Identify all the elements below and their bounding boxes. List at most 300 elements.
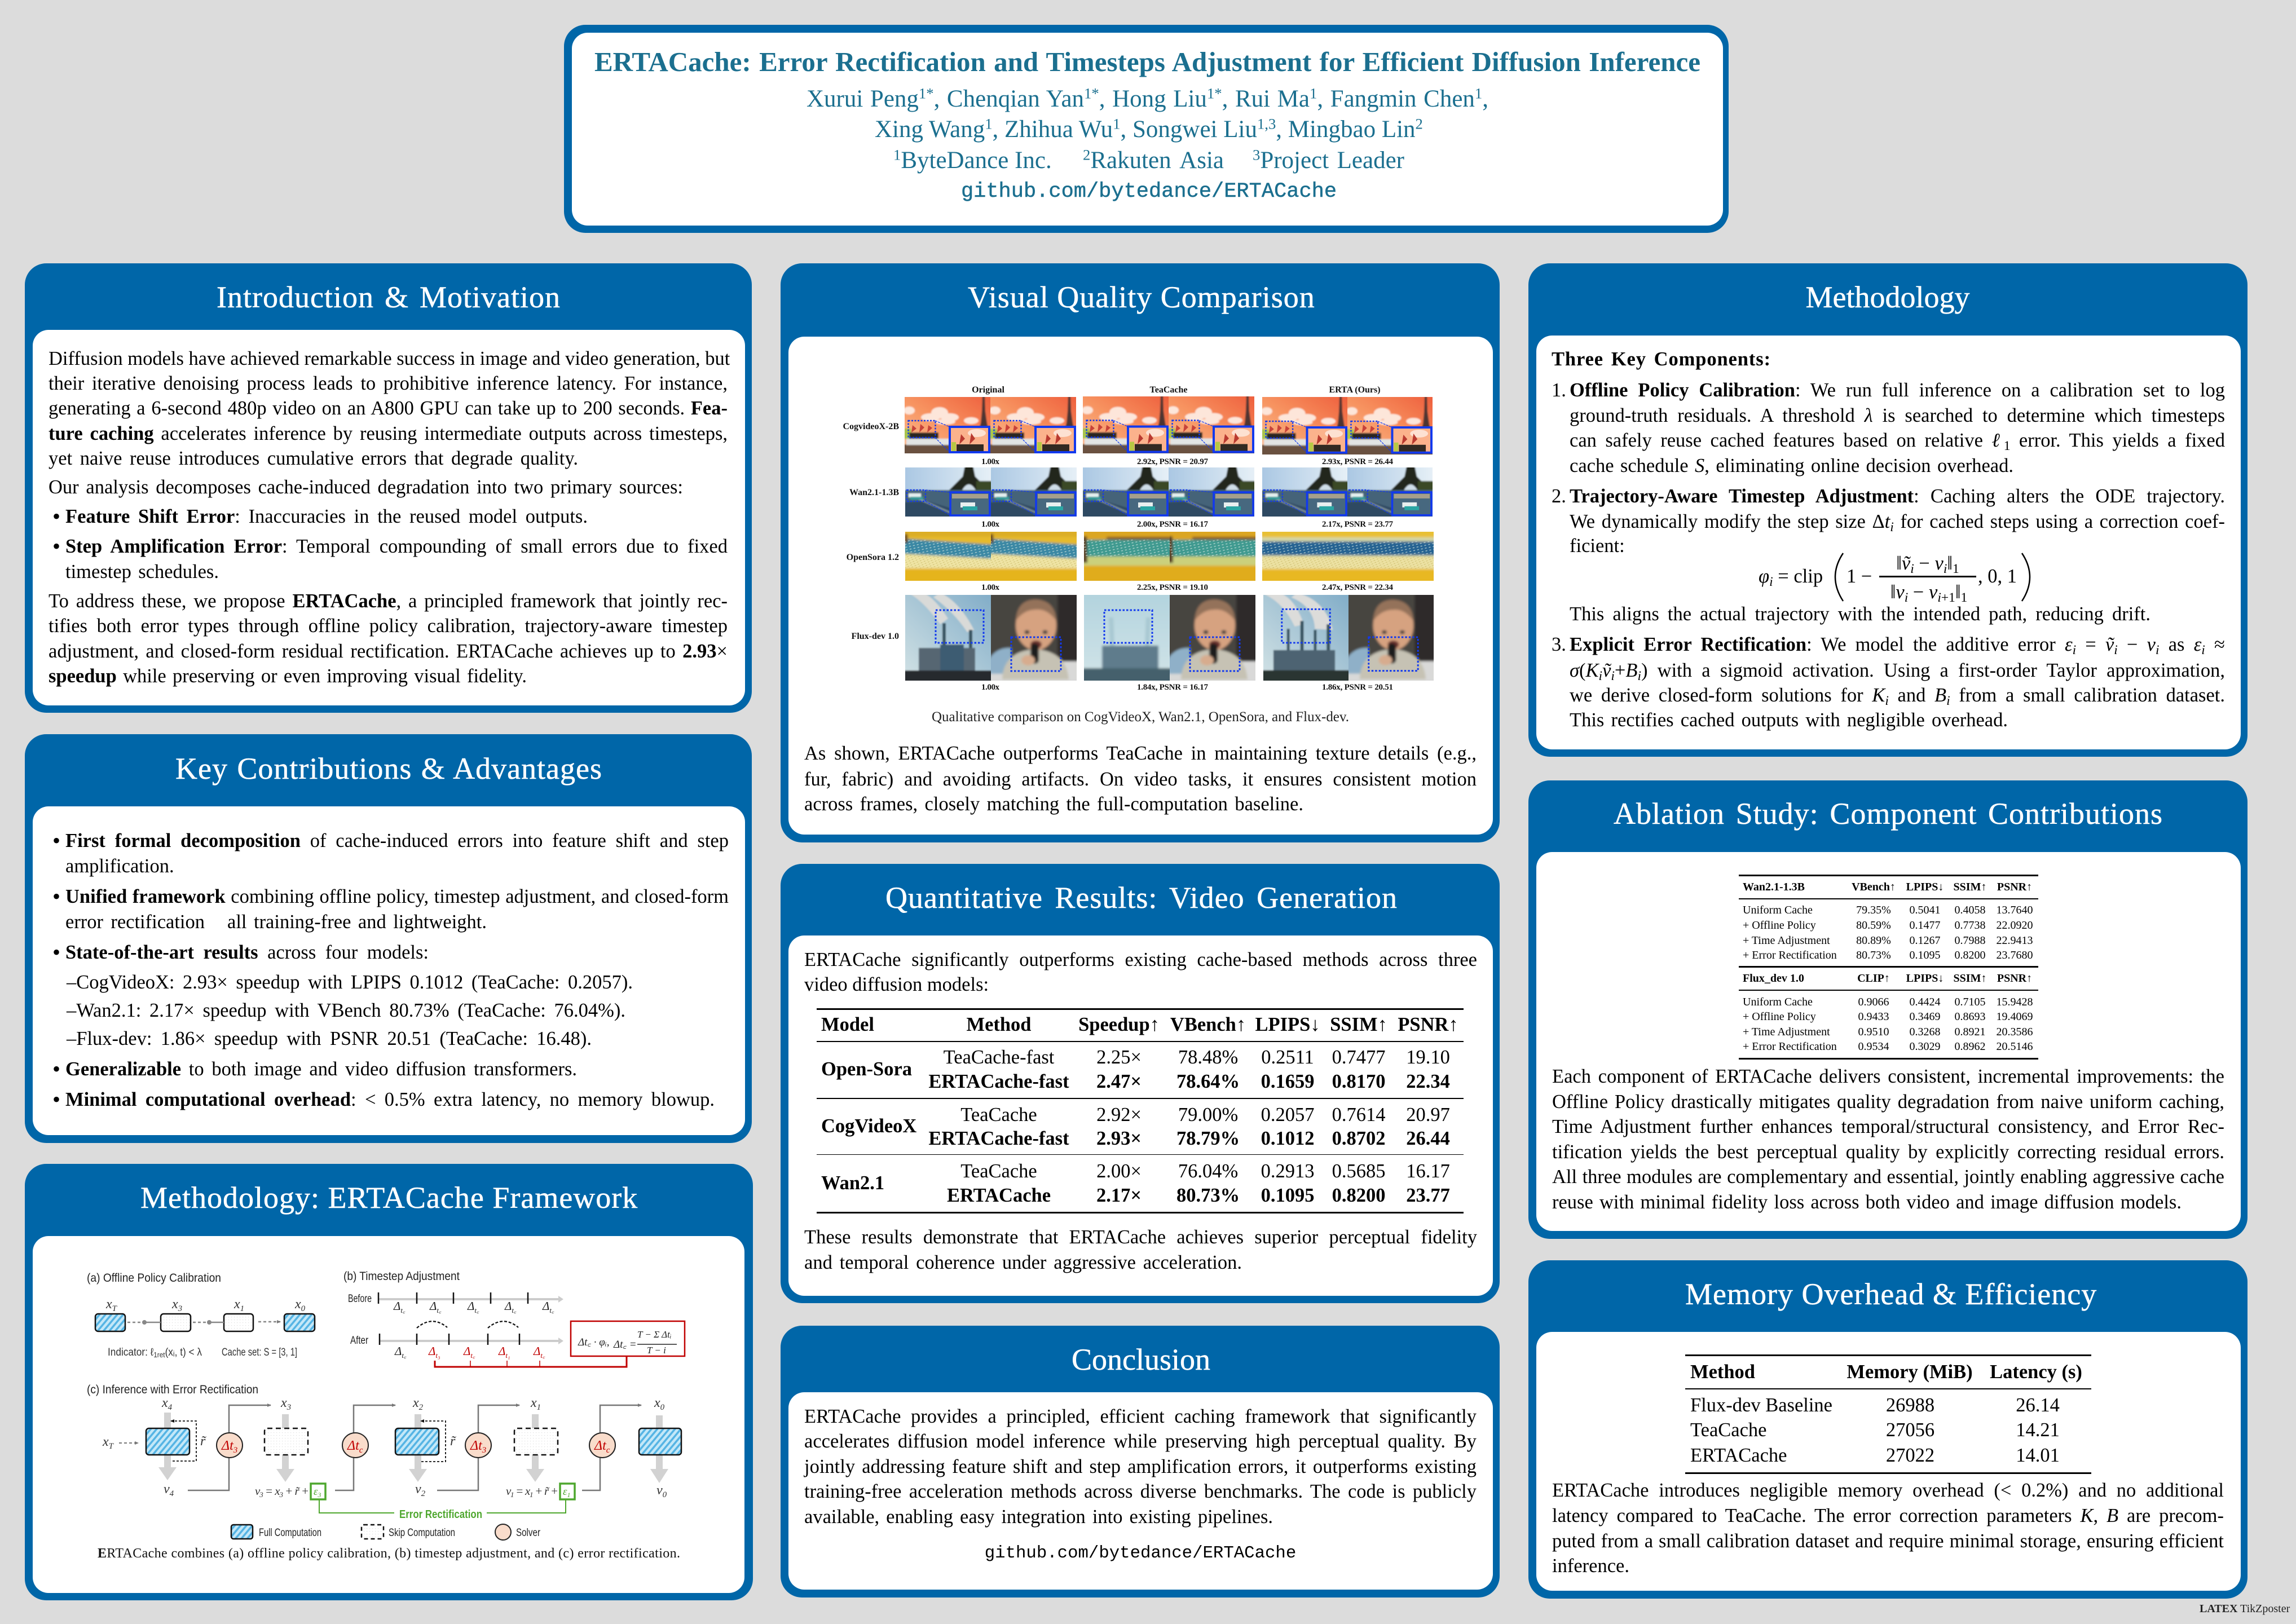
ablation summary: All three modules are complementary and essential, jointly enabling aggressive cache: [1552, 1166, 2224, 1188]
ablation table: 19.4069: [1997, 1010, 2033, 1023]
contribution list: •: [52, 884, 60, 909]
comparison image grid: [843, 385, 1434, 725]
(c) inference with error rectification: 3: [287, 1403, 291, 1412]
speedup captions: 2.25x, PSNR = 19.10: [1137, 583, 1208, 592]
intro text: [804, 949, 1477, 995]
ablation table: PSNR↑: [1997, 972, 2032, 985]
(c) inference with error rectification: 3: [482, 1446, 486, 1455]
memory table: Method: [1690, 1361, 1755, 1383]
(c) inference with error rectification: 3: [317, 1491, 321, 1499]
contribution list: Unified framework combining offline policy, timestep adjustment, and closed-form: [65, 886, 729, 907]
results table: 0.1012: [1261, 1128, 1314, 1149]
conclusion text: ERTACache provides a principled, efficient caching framework that significantly: [804, 1406, 1477, 1427]
contribution list: •: [52, 939, 60, 965]
(b) timestep adjustment: Δ: [395, 1344, 402, 1358]
row: CogVideoX images: [901, 394, 1436, 458]
ablation table: 80.89%: [1856, 934, 1891, 947]
diagram legend: Skip Computation: [389, 1527, 455, 1539]
formula: correction coefficient: [1759, 553, 2030, 605]
results table: 78.48%: [1178, 1047, 1238, 1068]
results table: 23.77: [1406, 1185, 1450, 1206]
(c) inference with error rectification: 1: [530, 1490, 534, 1499]
row labels: OpenSora 1.2: [847, 553, 899, 562]
(c) inference with error rectification: Error Rectification: [399, 1508, 482, 1521]
ablation table: Wan2.1-1.3B: [1743, 881, 1805, 893]
speedup captions: 1.00x: [981, 520, 999, 529]
(a) offline policy calibration: (xᵢ, t) < λ: [165, 1347, 202, 1358]
(a) offline policy calibration: Cache set: S = [3, 1]: [222, 1347, 297, 1358]
results table: PSNR↑: [1398, 1014, 1458, 1035]
proposal paragraph: speedup while preserving or even improving visual fidelity.: [49, 665, 527, 687]
(b) timestep adjustment: Δ: [534, 1344, 540, 1358]
ablation table: [1739, 875, 2038, 1060]
ablation table: 23.7680: [1997, 949, 2033, 961]
intro text: ERTACache significantly outperforms existing cache-based methods across three: [804, 949, 1477, 970]
speedup captions: 1.00x: [981, 583, 999, 592]
conclusion text: [804, 1406, 1477, 1528]
results table: 16.17: [1406, 1160, 1450, 1182]
conclusion text: training-free acceleration methods across diverse benchmarks. The code is publicly: [804, 1481, 1477, 1502]
component 2: ficient:: [1570, 535, 1625, 557]
row labels: [843, 422, 899, 641]
formula: correction coefficient: ‖ṽi − vi‖1: [1896, 553, 1959, 576]
ablation table: 13.7640: [1997, 904, 2033, 916]
(b) timestep adjustment: t꜀: [512, 1306, 517, 1314]
(a) offline policy calibration: 3: [178, 1304, 182, 1313]
conclusion text: accelerates diffusion model inference while preserving high perceptual quality. By: [804, 1431, 1477, 1452]
results table: 80.73%: [1176, 1185, 1240, 1206]
comparison paragraph: across frames, closely matching the full-computation baseline.: [804, 793, 1303, 815]
(b) timestep adjustment: After: [350, 1335, 369, 1347]
memory table: 14.21: [2016, 1419, 2060, 1441]
(b) timestep adjustment: Δ: [464, 1344, 470, 1358]
(c) inference with error rectification: x: [162, 1396, 168, 1410]
component 3: Explicit Error Rectification: We model the additive error εi = ṽi − vi as εi ≈: [1570, 634, 2225, 657]
error type bullets: •: [52, 533, 60, 559]
(b) timestep adjustment: Δ: [430, 1299, 437, 1313]
error type bullets: Step Amplification Error: Temporal compounding of small errors due to fixed: [65, 536, 728, 557]
memory table: ERTACache: [1690, 1445, 1787, 1466]
results table: 0.8170: [1332, 1071, 1385, 1092]
(a) offline policy calibration: x: [106, 1297, 112, 1312]
results table: SSIM↑: [1330, 1014, 1387, 1035]
contribution list: Minimal computational overhead: < 0.5% extra latency, no memory blowup.: [65, 1089, 715, 1110]
alignment sentence: This aligns the actual trajectory with the intended path, reducing drift.: [1570, 603, 2150, 625]
memory table: Flux-dev Baseline: [1690, 1394, 1832, 1416]
component 1: 1.: [1552, 379, 1566, 401]
component 3: This rectifies cached outputs with negligible overhead.: [1570, 709, 2008, 731]
formula: correction coefficient: ‖vi − vi+1‖1: [1890, 581, 1967, 605]
(b) timestep adjustment: t꜀: [549, 1306, 554, 1314]
ablation table: 0.1267: [1910, 934, 1940, 947]
(c) inference with error rectification: x: [281, 1396, 287, 1410]
column headers: ERTA (Ours): [1329, 385, 1381, 395]
(c) inference with error rectification: + r̃ +: [532, 1484, 558, 1498]
contribution list: amplification.: [65, 855, 174, 877]
comparison paragraph: As shown, ERTACache outperforms TeaCache in maintaining texture details (e.g.,: [804, 743, 1477, 764]
(c) inference with error rectification: 1: [537, 1403, 541, 1412]
memory table: 27056: [1886, 1419, 1934, 1441]
results table: Model: [821, 1014, 874, 1035]
panel: methodology components: [1528, 263, 2247, 757]
formula: correction coefficient: , 0, 1: [1978, 566, 2017, 587]
ablation summary: tification yields the best perceptual quality by explicitly correcting residual errors.: [1552, 1141, 2224, 1163]
(c) inference with error rectification: T: [109, 1442, 114, 1451]
results table: 78.64%: [1176, 1071, 1240, 1092]
results table: 0.8200: [1332, 1185, 1385, 1206]
(c) inference with error rectification: 0: [663, 1490, 667, 1499]
component 3: σ(Kiṽi+Bi) with a sigmoid activation. Using a first-order Taylor approximation,: [1570, 660, 2225, 683]
(c) inference with error rectification: 2: [421, 1489, 426, 1498]
results table: ERTACache-fast: [928, 1071, 1069, 1092]
column headers: Original: [972, 385, 1004, 395]
affiliations: 1ByteDance Inc.: [893, 146, 1052, 174]
panel: ablation study: [1528, 780, 2247, 1239]
contribution list: Generalizable to both image and video diffusion transformers.: [65, 1058, 577, 1080]
ablation table: VBench↑: [1852, 881, 1896, 893]
(c) inference with error rectification: [87, 1383, 681, 1521]
results table: 0.7477: [1332, 1047, 1385, 1068]
(a) offline policy calibration: x: [295, 1297, 301, 1312]
component 1: [1552, 379, 2225, 476]
ablation summary: reuse with minimal fidelity loss across both video and image diffusion models.: [1552, 1191, 2182, 1213]
ablation table: 80.73%: [1856, 949, 1891, 961]
(b) timestep adjustment: t꜀: [470, 1351, 475, 1360]
results summary: [804, 1226, 1477, 1273]
(a) offline policy calibration: Indicator: ℓ: [108, 1347, 158, 1358]
ablation table: Uniform Cache: [1743, 996, 1813, 1008]
ablation table: LPIPS↓: [1906, 881, 1944, 893]
panel: memory overhead: [1528, 1260, 2247, 1599]
ablation table: 0.4058: [1955, 904, 1985, 916]
results table: 2.93×: [1096, 1128, 1142, 1149]
(c) inference with error rectification: v: [255, 1484, 260, 1498]
panel: methodology framework: [25, 1164, 753, 1600]
memory table: [1685, 1354, 2091, 1474]
ablation table: 20.5146: [1997, 1040, 2033, 1053]
heading: Memory Overhead & Efficiency: [1685, 1277, 2097, 1311]
ablation table: 0.7105: [1955, 996, 1985, 1008]
results table: Wan2.1: [821, 1172, 884, 1194]
ablation table: 0.5041: [1910, 904, 1940, 916]
(c) inference with error rectification: x: [531, 1396, 537, 1410]
memory table: Memory (MiB): [1847, 1361, 1973, 1383]
heading: Visual Quality Comparison: [968, 280, 1315, 314]
results table: TeaCache-fast: [944, 1047, 1054, 1068]
ablation table: + Offline Policy: [1743, 919, 1816, 932]
(c) inference with error rectification: v: [656, 1483, 663, 1498]
intro paragraph: their iterative denoising process leads to prohibitive inference latency. For instance,: [49, 373, 728, 394]
(c) inference with error rectification: r̃: [200, 1434, 206, 1449]
proposal paragraph: adjustment, and closed-form residual rectification. ERTACache achieves up to 2.93×: [49, 641, 728, 662]
error type bullets: [52, 504, 728, 582]
component 2: [1552, 486, 2225, 557]
(c) inference with error rectification: Δt: [594, 1438, 606, 1453]
ablation table: + Offline Policy: [1743, 1010, 1816, 1023]
conclusion text: jointly addressing feature shift and step amplification errors, it outperforms existing: [804, 1456, 1477, 1477]
formula: correction coefficient: φi = clip: [1759, 566, 1823, 589]
poster title: ERTACache: Error Rectification and Timesteps Adjustment for Efficient Diffusion Inference: [594, 46, 1700, 77]
memory table: Latency (s): [1990, 1361, 2082, 1383]
(a) offline policy calibration: T: [112, 1304, 118, 1313]
panel: conclusion: [781, 1326, 1500, 1597]
(b) timestep adjustment: t₃: [435, 1351, 440, 1360]
affiliations: 2Rakuten Asia: [1083, 146, 1224, 174]
(b) timestep adjustment: Δ: [543, 1299, 549, 1313]
ablation table: + Time Adjustment: [1743, 1026, 1830, 1038]
results table: 0.1095: [1261, 1185, 1314, 1206]
results summary: These results demonstrate that ERTACache achieves superior perceptual fidelity: [804, 1226, 1477, 1248]
results table: TeaCache: [960, 1160, 1037, 1182]
results table: 78.79%: [1176, 1128, 1240, 1149]
ablation table: + Error Rectification: [1743, 1040, 1837, 1053]
results table: 2.25×: [1096, 1047, 1142, 1068]
intro paragraph: ture caching accelerates inference by reusing intermediate outputs across timesteps,: [49, 423, 728, 444]
ablation summary: Each component of ERTACache delivers consistent, incremental improvements: the: [1552, 1066, 2224, 1087]
(b) timestep adjustment: t꜀: [540, 1351, 545, 1360]
(c) inference with error rectification: x: [103, 1435, 109, 1449]
ablation table: SSIM↑: [1954, 881, 1986, 893]
heading: Ablation Study: Component Contributions: [1614, 797, 2163, 831]
affiliations: [893, 146, 1404, 174]
heading: Conclusion: [1072, 1343, 1210, 1376]
speedup captions: 2.00x, PSNR = 16.17: [1137, 520, 1208, 529]
component 3: 3.: [1552, 634, 1566, 655]
(c) inference with error rectification: 4: [170, 1489, 174, 1498]
(c) inference with error rectification: v: [415, 1482, 421, 1497]
results table: 20.97: [1406, 1104, 1450, 1126]
results summary: and temporal coherence under aggressive acceleration.: [804, 1252, 1242, 1273]
(b) timestep adjustment: Δ: [505, 1299, 512, 1313]
memory table: 26988: [1886, 1394, 1934, 1416]
column headers: [972, 385, 1381, 395]
figure caption: ERTACache combines (a) offline policy calibration, (b) timestep adjustment, and (c) error rectification.: [98, 1546, 680, 1561]
ablation table: 80.59%: [1856, 919, 1891, 932]
ablation table: 0.3469: [1910, 1010, 1940, 1023]
(c) inference with error rectification: c: [606, 1446, 610, 1455]
contribution list: •: [52, 1087, 60, 1112]
ablation table: 22.9413: [1997, 934, 2033, 947]
component 2: 2.: [1552, 486, 1566, 507]
(c) inference with error rectification: 1: [567, 1491, 571, 1499]
ablation summary: [1552, 1064, 2224, 1215]
(b) timestep adjustment: t꜀: [437, 1306, 442, 1314]
(b) timestep adjustment: Before: [348, 1293, 372, 1305]
component 3: we derive closed-form solutions for Ki and Bi from a small calibration dataset.: [1570, 685, 2225, 708]
ablation table: PSNR↑: [1997, 881, 2032, 893]
ablation table: 0.8962: [1955, 1040, 1985, 1053]
ablation table: LPIPS↓: [1906, 972, 1944, 985]
memory table: 14.01: [2016, 1445, 2060, 1466]
memory summary: ERTACache introduces negligible memory overhead (< 0.2%) and no additional: [1552, 1480, 2224, 1501]
error type bullets: •: [52, 504, 60, 529]
affiliations: 3Project Leader: [1253, 146, 1404, 174]
component 1: cache schedule S, eliminating online decision overhead.: [1570, 455, 2013, 476]
row labels: Flux-dev 1.0: [852, 632, 899, 641]
heading: Methodology: [1806, 280, 1969, 314]
intro paragraph: yet naive reuse introduces cumulative errors that degrade quality.: [49, 448, 578, 469]
(c) inference with error rectification: Δt: [470, 1438, 482, 1453]
heading: Methodology: ERTACache Framework: [140, 1181, 638, 1215]
contribution list: –CogVideoX: 2.93× speedup with LPIPS 0.1012 (TeaCache: 0.2057).: [67, 972, 633, 993]
results table: CogVideoX: [821, 1115, 916, 1137]
ablation table: 0.3029: [1910, 1040, 1940, 1053]
proposal paragraph: [49, 590, 728, 687]
results table: 0.5685: [1332, 1160, 1385, 1182]
ablation table: 0.1095: [1910, 949, 1940, 961]
speedup captions: 1.84x, PSNR = 16.17: [1137, 683, 1208, 692]
component 2: Trajectory-Aware Timestep Adjustment: Caching alters the ODE trajectory.: [1570, 486, 2225, 507]
(b) timestep adjustment: Δ: [499, 1344, 505, 1358]
results table: 22.34: [1406, 1071, 1450, 1092]
(c) inference with error rectification: ε: [314, 1486, 318, 1498]
(a) offline policy calibration: (a) Offline Policy Calibration: [87, 1272, 221, 1285]
heading: Quantitative Results: Video Generation: [885, 881, 1398, 915]
ablation summary: Time Adjustment further enhances temporal/structural consistency, and Error Rec-: [1552, 1116, 2224, 1137]
speedup captions: 1.00x: [981, 457, 999, 466]
results table: 2.47×: [1096, 1071, 1142, 1092]
(b) timestep adjustment: t꜀: [400, 1306, 406, 1314]
component 2: We dynamically modify the step size Δti for cached steps using a correction coef-: [1570, 511, 2225, 535]
results table: Open-Sora: [821, 1058, 912, 1080]
ablation table: Uniform Cache: [1743, 904, 1813, 916]
(c) inference with error rectification: v: [506, 1484, 511, 1498]
(c) inference with error rectification: 3: [233, 1446, 237, 1455]
ablation table: + Error Rectification: [1743, 949, 1837, 961]
contribution list: [52, 828, 729, 1112]
(a) offline policy calibration: x: [234, 1297, 240, 1312]
panel: quantitative results: [781, 864, 1500, 1303]
panel: key contributions: [25, 734, 752, 1143]
formula: correction coefficient: 1 −: [1847, 566, 1872, 587]
intro text: video diffusion models:: [804, 974, 989, 995]
proposal paragraph: To address these, we propose ERTACache, a principled framework that jointly rec-: [49, 590, 728, 612]
ablation table: 0.9534: [1858, 1040, 1889, 1053]
(b) timestep adjustment: t₁: [505, 1351, 510, 1360]
analysis sentence: Our analysis decomposes cache-induced degradation into two primary sources:: [49, 476, 683, 498]
ablation table: 79.35%: [1856, 904, 1891, 916]
(b) timestep adjustment: t꜀: [474, 1306, 479, 1314]
memory table: 26.14: [2016, 1394, 2060, 1416]
comparison paragraph: [804, 743, 1477, 815]
framework diagram: [87, 1270, 686, 1561]
contribution list: •: [52, 1056, 60, 1082]
results table: 0.2057: [1261, 1104, 1314, 1126]
component 1: can safely reuse cached features based on relative ℓ1 error. This yields a fixed: [1570, 430, 2225, 453]
authors: [807, 85, 1488, 143]
heading: Introduction & Motivation: [217, 280, 561, 314]
error type bullets: timestep schedules.: [65, 561, 219, 582]
memory table: TeaCache: [1690, 1419, 1766, 1441]
results table: 0.2511: [1261, 1047, 1314, 1068]
(c) inference with error rectification: 3: [259, 1490, 263, 1499]
intro paragraph: generating a 6-second 480p video on an A800 GPU can take up to 200 seconds. Fea-: [49, 398, 728, 419]
results table: TeaCache: [960, 1104, 1037, 1126]
diagram legend: Full Computation: [259, 1527, 321, 1539]
footer credit: LATEX TikZposter: [2200, 1603, 2290, 1615]
intro paragraph: [49, 348, 730, 469]
row: OpenSora images: [902, 528, 1437, 584]
(b) timestep adjustment: t꜀: [402, 1351, 407, 1360]
results table: 0.8702: [1332, 1128, 1385, 1149]
row: Wan2.1 images: [902, 464, 1436, 520]
ablation table: 22.0920: [1997, 919, 2033, 932]
ablation table: 15.9428: [1997, 996, 2033, 1008]
memory summary: inference.: [1552, 1555, 1629, 1577]
ablation table: 0.3268: [1910, 1026, 1940, 1038]
(c) inference with error rectification: = x: [513, 1484, 531, 1498]
(c) inference with error rectification: x: [413, 1396, 419, 1410]
(a) offline policy calibration: 0: [301, 1304, 306, 1313]
(b) timestep adjustment: Δt꜀ =: [613, 1339, 637, 1351]
authors: Xing Wang1, Zhihua Wu1, Songwei Liu1,3, Mingbao Lin2: [875, 115, 1423, 143]
(c) inference with error rectification: x: [654, 1396, 660, 1410]
results table: 0.1659: [1261, 1071, 1314, 1092]
speedup captions: 2.47x, PSNR = 22.34: [1322, 583, 1393, 592]
results table: 26.44: [1406, 1128, 1450, 1149]
intro paragraph: Diffusion models have achieved remarkable success in image and video generation, but: [49, 348, 730, 369]
(c) inference with error rectification: 2: [419, 1403, 424, 1412]
ablation table: 0.9066: [1858, 996, 1889, 1008]
results table: 0.7614: [1332, 1104, 1385, 1126]
row labels: CogvideoX-2B: [843, 422, 899, 431]
results table: ERTACache-fast: [928, 1128, 1069, 1149]
comparison paragraph: fur, fabric) and avoiding artifacts. On video tasks, it ensures consistent motion: [804, 769, 1477, 790]
memory summary: puted from a small calibration dataset and require minimal storage, ensuring efficient: [1552, 1530, 2224, 1552]
(c) inference with error rectification: r̃: [450, 1434, 456, 1449]
ablation table: CLIP↑: [1857, 972, 1890, 985]
(c) inference with error rectification: + r̃ +: [283, 1484, 309, 1498]
results table: 2.17×: [1096, 1185, 1142, 1206]
panel: visual quality comparison: [781, 263, 1500, 842]
github link: github.com/bytedance/ERTACache: [985, 1543, 1296, 1563]
(a) offline policy calibration: x: [172, 1297, 178, 1312]
subheading: Three Key Components:: [1552, 348, 1771, 370]
title panel: [564, 25, 1729, 233]
(b) timestep adjustment: Δ: [429, 1344, 435, 1358]
ablation table: 0.8921: [1955, 1026, 1985, 1038]
authors: Xurui Peng1*, Chenqian Yan1*, Hong Liu1*, Rui Ma1, Fangmin Chen1,: [807, 85, 1488, 112]
ablation table: Flux_dev 1.0: [1743, 972, 1804, 985]
ablation table: + Time Adjustment: [1743, 934, 1830, 947]
row: Flux-dev images: [902, 592, 1437, 684]
results table: ERTACache: [947, 1185, 1051, 1206]
heading: Key Contributions & Advantages: [175, 752, 602, 785]
conclusion text: available, enabling easy integration into existing pipelines.: [804, 1506, 1273, 1528]
results table: 19.10: [1406, 1047, 1450, 1068]
(a) offline policy calibration: 1: [240, 1304, 244, 1313]
memory summary: latency compared to TeaCache. The error correction parameters K, B are precom-: [1552, 1505, 2224, 1526]
component 3: [1552, 632, 2225, 732]
ablation table: 20.3586: [1997, 1026, 2033, 1038]
contribution list: First formal decomposition of cache-induced errors into feature shift and step: [65, 830, 729, 851]
(b) timestep adjustment: Δ: [468, 1299, 474, 1313]
ablation table: 0.9510: [1858, 1026, 1889, 1038]
ablation table: SSIM↑: [1954, 972, 1986, 985]
results table: Speedup↑: [1078, 1014, 1160, 1035]
error type bullets: Feature Shift Error: Inaccuracies in the reused model outputs.: [65, 506, 588, 527]
(c) inference with error rectification: ε: [563, 1486, 567, 1498]
ablation table: 0.8200: [1955, 949, 1985, 961]
(c) inference with error rectification: Δt: [222, 1438, 233, 1453]
speedup captions: [981, 457, 1393, 692]
ablation table: 0.7738: [1955, 919, 1985, 932]
component 1: Offline Policy Calibration: We run full inference on a calibration set to log: [1570, 379, 2225, 401]
results table: 2.92×: [1096, 1104, 1142, 1126]
component 1: ground-truth residuals. A threshold λ is searched to determine which timesteps: [1570, 405, 2225, 426]
row labels: Wan2.1-1.3B: [849, 488, 899, 497]
results table: 76.04%: [1178, 1160, 1238, 1182]
